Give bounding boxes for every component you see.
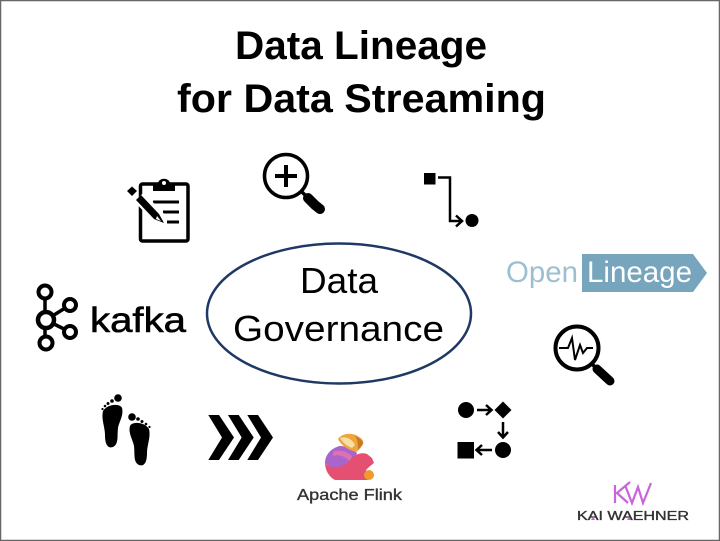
logo: OpenLineage: Lineage	[587, 256, 692, 289]
logo: kafka: kafka	[90, 301, 187, 340]
logo: kafka	[38, 286, 187, 350]
center ellipse: data governance	[207, 244, 471, 384]
logo: Kai Waehner: KAI WAEHNER	[577, 509, 689, 523]
center ellipse: data governance: Data	[300, 260, 379, 301]
center ellipse: data governance: Governance	[233, 308, 444, 349]
squirrel body	[325, 453, 374, 480]
logo: Apache Flink	[297, 434, 402, 504]
logo: OpenLineage: Open	[506, 256, 578, 289]
icon: workflow diagram	[458, 402, 512, 458]
icon: clipboard with pencil	[127, 179, 188, 241]
title: for Data Streaming	[177, 77, 546, 121]
wordmark: Apache Flink	[297, 487, 402, 504]
title: Data Lineage	[235, 24, 487, 68]
logo: Kai Waehner	[577, 482, 689, 523]
logo: OpenLineage	[506, 254, 707, 292]
icon: magnifier with plus	[264, 154, 320, 209]
icon: magnifier with pulse	[556, 326, 610, 381]
icon: footprints	[101, 394, 151, 465]
icon: triple chevron	[208, 415, 273, 460]
acorn	[364, 470, 374, 480]
title	[177, 24, 546, 121]
icon: process connector	[424, 173, 478, 227]
squirrel tail	[325, 446, 357, 472]
